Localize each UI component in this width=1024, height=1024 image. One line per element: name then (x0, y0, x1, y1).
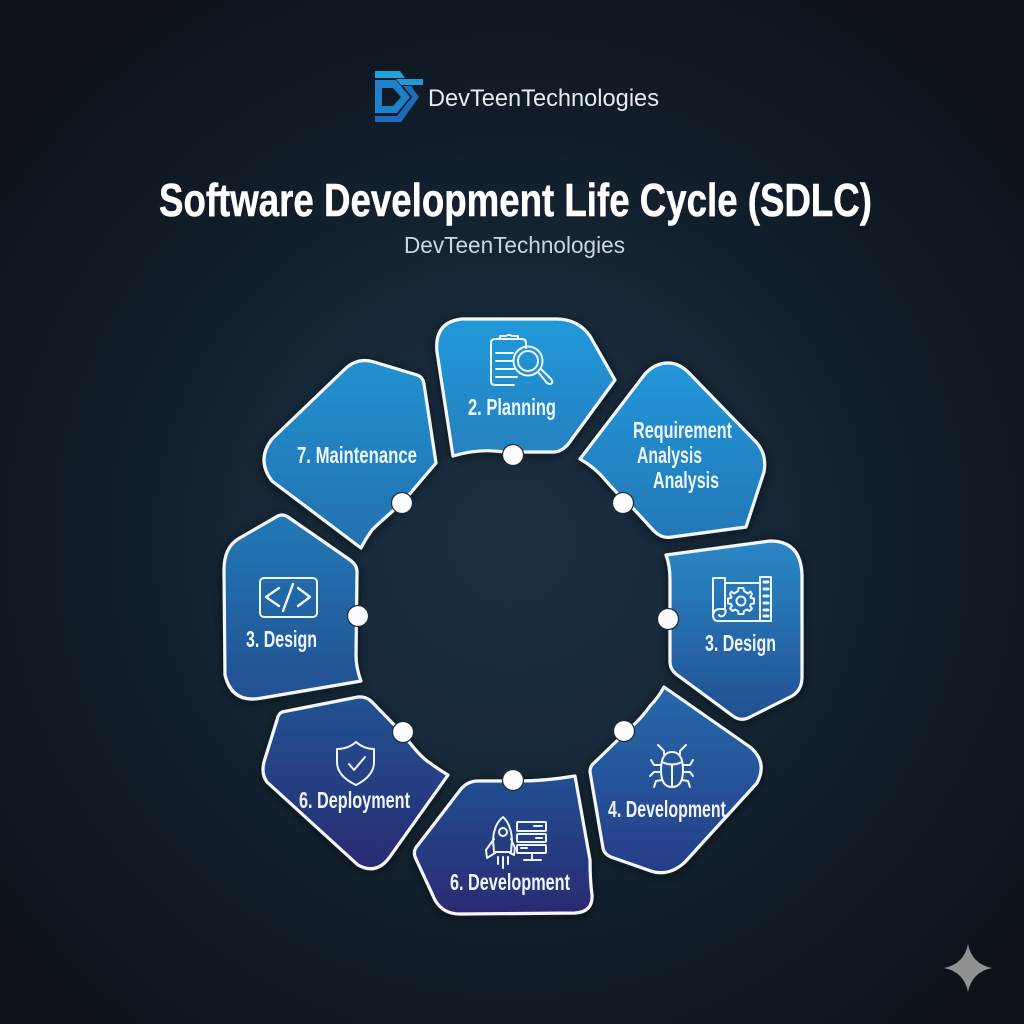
label: 2. Planning (468, 394, 556, 420)
segment shape (414, 776, 592, 914)
panel: 6. Development (414, 770, 592, 914)
icon: blueprint with gear (713, 577, 771, 621)
connector node (658, 608, 678, 630)
connector node (392, 722, 414, 742)
logo (375, 71, 659, 122)
icon: code brackets (260, 578, 317, 617)
label: 4. Development (608, 796, 726, 822)
segment shape (437, 319, 615, 456)
panel: 2. Planning (437, 319, 615, 466)
segment shape (590, 687, 761, 873)
icon: bug (650, 745, 693, 787)
logo wordmark: DevTeenTechnologies (428, 85, 659, 112)
icon: clipboard and magnifier (491, 335, 552, 385)
panel: 7. Maintenance (264, 361, 436, 548)
connector node (392, 492, 412, 514)
label: Requirement (633, 417, 732, 443)
connector node (612, 492, 634, 514)
segment shape (263, 697, 448, 869)
label: 3. Design (705, 630, 776, 656)
segment shape (666, 541, 802, 719)
connector node (348, 606, 368, 626)
label: 3. Design (246, 626, 317, 652)
segment shape (224, 515, 361, 699)
label: 7. Maintenance (297, 442, 417, 468)
panel: Requirement Analysis (580, 363, 765, 537)
label: 6. Deployment (299, 787, 410, 813)
icon: shield check (337, 742, 374, 785)
label line 3: Analysis (653, 467, 719, 493)
panel: 3. Design left (224, 515, 368, 699)
connector node (614, 720, 634, 742)
panel: 3. Design right (658, 541, 802, 719)
segment shape (580, 363, 765, 537)
panel: 6. Deployment (263, 697, 448, 869)
subtitle: DevTeenTechnologies (404, 232, 625, 258)
icon: sparkle watermark (944, 944, 992, 992)
connector node (502, 770, 524, 790)
connector node (502, 444, 524, 466)
label line 2: Analysis (637, 442, 702, 468)
label: 6. Development (450, 869, 570, 895)
icon: rocket and server (486, 817, 546, 868)
panel: 4. Development (590, 687, 761, 873)
segment shape (264, 361, 436, 548)
logo mark (375, 71, 423, 122)
